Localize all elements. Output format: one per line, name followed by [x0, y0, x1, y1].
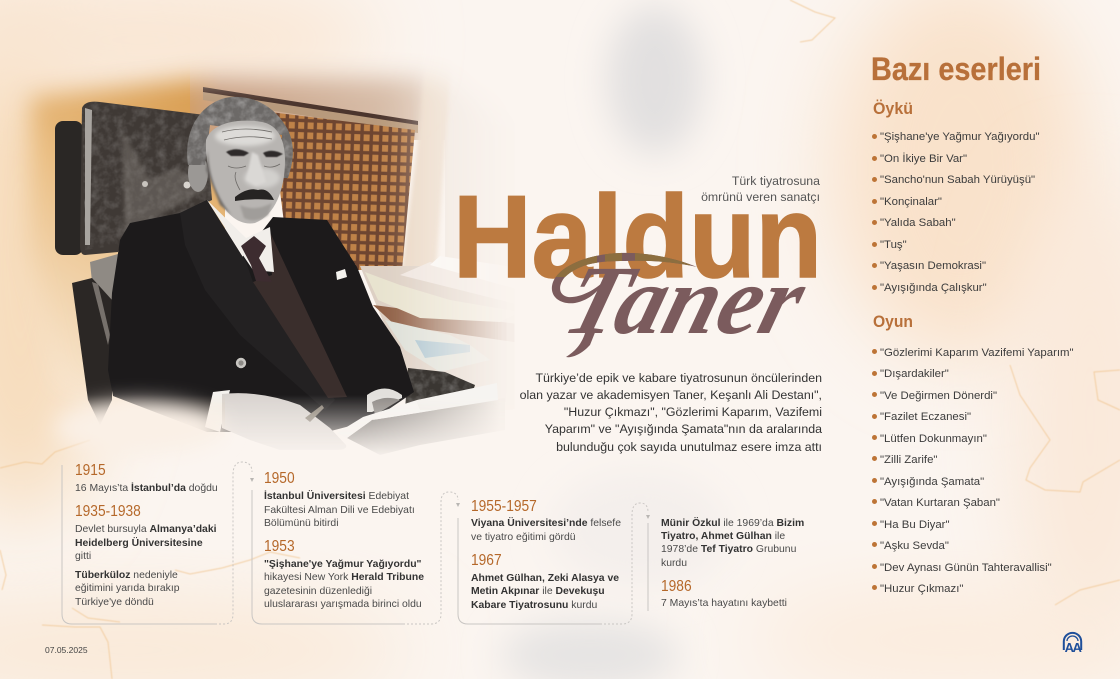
text: 1967 — [471, 552, 502, 569]
button — [236, 358, 246, 368]
text: İstanbul Üniversitesi Edebiyat — [264, 491, 409, 502]
text: uluslararası yarışmada birinci oldu — [264, 599, 422, 610]
text: 1935-1938 — [75, 503, 141, 520]
intro paragraph — [520, 371, 822, 454]
sitter and chair — [55, 97, 505, 455]
text: Heidelberg Üniversitesine — [75, 538, 203, 549]
text: "Yalıda Sabah" — [880, 217, 956, 229]
icon: AA logo: AA — [1065, 640, 1082, 655]
text: 1915 — [75, 462, 106, 479]
text: olan yazar ve akademisyen Taner, Keşanlı Ali Destanı", — [520, 388, 822, 402]
text: Tiyatro, Ahmet Gülhan ile — [661, 531, 785, 542]
text: Metin Akpınar ile Devekuşu — [471, 586, 605, 597]
text: "Ayışığında Çalışkur" — [880, 282, 987, 294]
text: "Fazilet Eczanesi" — [880, 411, 971, 423]
text: ve tiyatro eğitimi gördü — [471, 532, 576, 543]
text: Ahmet Gülhan, Zeki Alasya ve — [471, 573, 619, 584]
text: Türk tiyatrosuna — [732, 174, 820, 188]
desk shadow under newspaper — [347, 402, 496, 454]
jacket — [108, 200, 414, 432]
list: plays — [872, 347, 1074, 595]
timeline card 3 — [471, 498, 621, 611]
subtitle — [701, 174, 820, 204]
text: Tüberküloz nedeniyle — [75, 570, 178, 581]
text: eğitimini yarıda bırakıp — [75, 583, 180, 594]
timeline card 2 — [264, 470, 424, 610]
text: bulunduğu çok sayıda unutulmaz esere imza attı — [556, 440, 822, 454]
text: 1950 — [264, 470, 295, 487]
text: 1978’de Tef Tiyatro Grubunu — [661, 544, 796, 555]
text: "Ayışığında Şamata" — [880, 476, 984, 488]
text: "On İkiye Bir Var" — [880, 153, 967, 165]
text: "Ha Bu Diyar" — [880, 519, 950, 531]
text: "Huzur Çıkmazı" — [880, 583, 963, 595]
hand and cuff — [205, 390, 230, 432]
date: 07.05.2025 — [45, 645, 88, 655]
heading: stories: Öykü — [873, 99, 913, 118]
text: Yaparım" ve "Ayışığında Şamata"nın da aralarında — [545, 422, 822, 436]
title: Haldun: Haldun — [453, 171, 822, 302]
text: 1986 — [661, 578, 692, 595]
text: 1953 — [264, 538, 295, 555]
newspaper — [337, 383, 498, 438]
text: "Vatan Kurtaran Şaban" — [880, 497, 1000, 509]
shirt — [207, 200, 274, 272]
text: "Dev Aynası Günün Tahteravallisi" — [880, 562, 1052, 574]
title: Taner script: Taner — [554, 246, 818, 355]
text: "Zilli Zarife" — [880, 454, 937, 466]
heading: plays: Oyun — [873, 313, 913, 331]
text: "Şişhane'ye Yağmur Yağıyordu" — [264, 559, 421, 570]
list: stories — [872, 131, 1040, 294]
text: Bölümünü bitirdi — [264, 518, 339, 529]
text: Münir Özkul ile 1969’da Bizim — [661, 518, 804, 529]
text: "Tuş" — [880, 239, 907, 251]
text: kurdu — [661, 558, 687, 569]
text: "Lütfen Dokunmayın" — [880, 433, 987, 445]
timeline card 1 — [75, 462, 218, 608]
text: "Şişhane'ye Yağmur Yağıyordu" — [880, 131, 1040, 143]
heading: works: Bazı eserleri — [871, 51, 1041, 87]
timeline card 4 — [661, 517, 804, 609]
text: hikayesi New York Herald Tribune — [264, 572, 424, 583]
text: "Ve Değirmen Dönerdi" — [880, 390, 997, 402]
text: Türkiye'ye döndü — [75, 597, 154, 608]
text: Fakültesi Alman Dili ve Edebiyatı — [264, 505, 415, 516]
head — [188, 161, 208, 192]
text: Viyana Üniversitesi’nde felsefe — [471, 518, 621, 529]
text: "Sancho'nun Sabah Yürüyüşü" — [880, 174, 1035, 186]
text: 16 Mayıs’ta İstanbul’da doğdu — [75, 483, 218, 494]
text: gitti — [75, 551, 91, 562]
vest — [253, 228, 347, 398]
fade over lower left of jacket — [55, 402, 225, 454]
text: "Huzur Çıkmazı", "Gözlerimi Kaparım, Vazifemi — [564, 405, 822, 419]
text: 7 Mayıs’ta hayatını kaybetti — [661, 598, 787, 609]
photo: Haldun Taner at his desk — [16, 61, 514, 454]
room behind the sitter — [16, 61, 514, 396]
text: "Konçinalar" — [880, 196, 942, 208]
pocket square — [336, 269, 347, 280]
text: gazetesinin düzenlediği — [264, 586, 372, 597]
text: "Yaşasın Demokrasi" — [880, 260, 986, 272]
text: "Gözlerimi Kaparım Vazifemi Yaparım" — [880, 347, 1074, 359]
text: ömrünü veren sanatçı — [701, 190, 820, 204]
text: Türkiye’de epik ve kabare tiyatrosunun öncülerinden — [535, 371, 822, 385]
text: "Dışardakiler" — [880, 368, 949, 380]
text: Kabare Tiyatrosunu kurdu — [471, 600, 597, 611]
text: 1955-1957 — [471, 498, 537, 515]
text: Devlet bursuyla Almanya’daki — [75, 524, 217, 535]
tie — [241, 236, 269, 281]
text: "Aşku Sevda" — [880, 540, 949, 552]
